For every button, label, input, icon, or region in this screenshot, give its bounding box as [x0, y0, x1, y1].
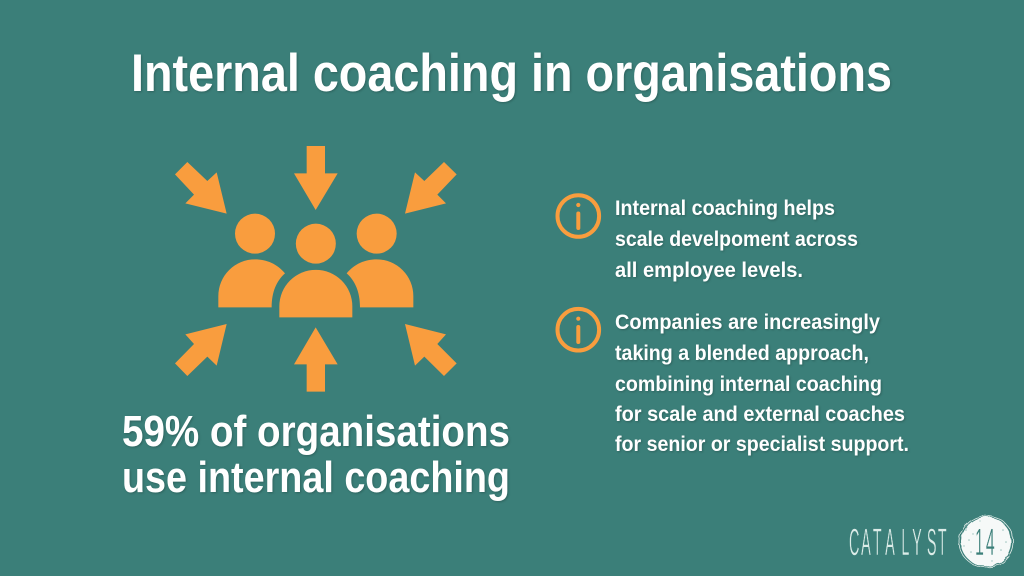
text block: blended approach: combining internal coaching: [615, 372, 882, 396]
text block: scale development: [615, 196, 858, 282]
text block: blended approach: taking a blended approach,: [615, 341, 869, 365]
text block: scale development: all employee levels.: [615, 258, 803, 282]
logo wordmark: CATALYST: [849, 522, 947, 564]
person: right: [347, 214, 413, 307]
text block: blended approach: for senior or specialist support.: [615, 432, 909, 456]
arrow: bottom: [294, 327, 338, 392]
text block: blended approach: for scale and external coaches: [615, 402, 905, 426]
arrow: bottom left: [175, 324, 227, 376]
icon: info 2: [558, 309, 599, 351]
logo badge: [959, 516, 1013, 568]
statistic text: [122, 407, 510, 502]
icon: info 1: [558, 195, 599, 237]
arrow: bottom right: [405, 324, 457, 376]
arrow: top right: [405, 162, 457, 214]
statistic text: use internal coaching: [122, 453, 510, 502]
person: left: [218, 214, 285, 307]
text block: blended approach: [615, 310, 909, 456]
arrow: top left: [175, 162, 227, 214]
text block: scale development: scale develpoment across: [615, 227, 858, 251]
title: Internal coaching in organisations: [131, 44, 892, 103]
text block: scale development: Internal coaching helps: [615, 196, 835, 220]
text block: blended approach: Companies are increasingly: [615, 310, 880, 334]
arrow: top: [294, 146, 338, 210]
logo: Catalyst 14: [849, 516, 1013, 568]
person: centre: [279, 224, 352, 317]
logo number: 14: [975, 522, 995, 564]
icon: people gathering with inward arrows: [175, 146, 457, 392]
statistic text: 59% of organisations: [122, 407, 510, 456]
